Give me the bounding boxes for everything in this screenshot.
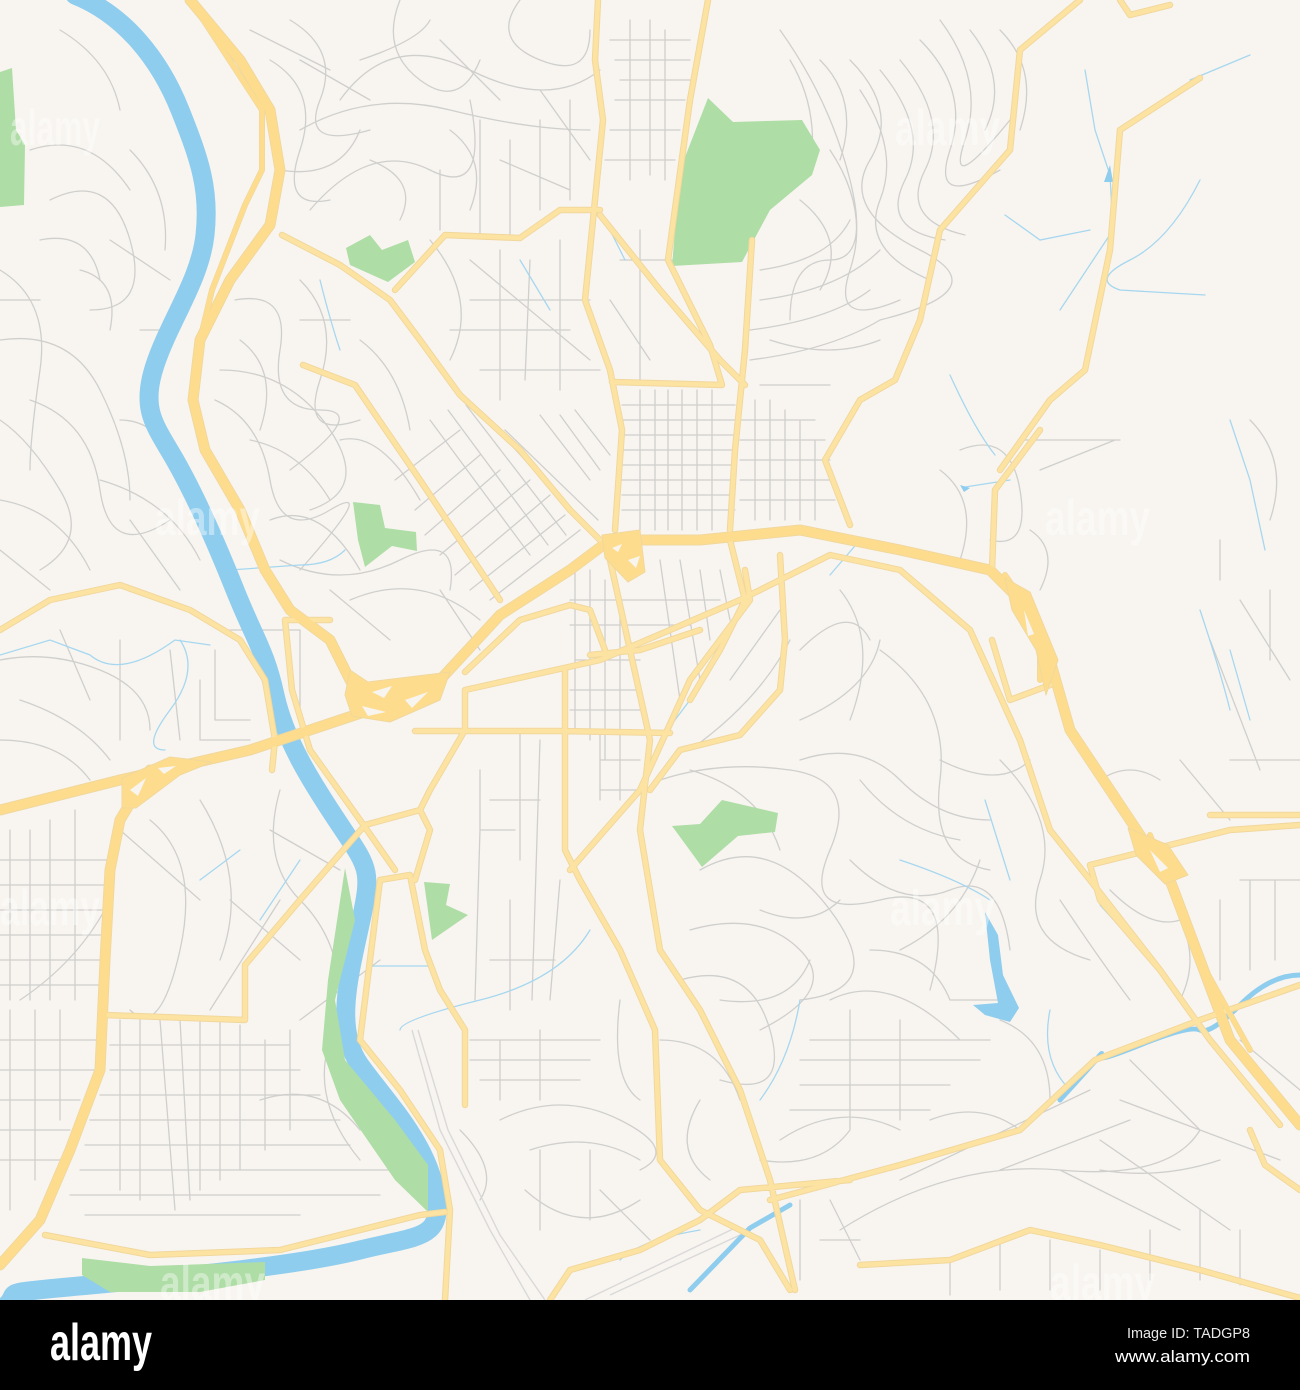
- park: central west: [353, 502, 417, 567]
- footer bar: [0, 1300, 1300, 1390]
- watermark: alamy: [10, 100, 100, 156]
- highway interchanges: [122, 530, 1188, 884]
- pond north: [722, 165, 1113, 492]
- watermark: alamy: [155, 490, 260, 546]
- park: central south: [672, 800, 778, 867]
- interchange: river west: [122, 757, 212, 808]
- park: bottom: [82, 1258, 265, 1292]
- interchange: centre: [602, 530, 645, 582]
- French Broad river: [0, 0, 437, 1310]
- watermark: alamy: [1045, 490, 1150, 546]
- park: north reserve: [672, 98, 820, 266]
- watermark: alamy: [1050, 1255, 1155, 1311]
- watermark: alamy: [160, 1255, 265, 1311]
- footer logo: alamy: [50, 1314, 152, 1372]
- lake: [973, 912, 1019, 1022]
- park: top left: [0, 68, 25, 207]
- interchange: east: [1005, 578, 1058, 695]
- parks: [0, 68, 820, 1292]
- watermark: alamy: [895, 100, 1000, 156]
- interchange gaps: [130, 544, 1168, 872]
- interchange: west: [345, 670, 450, 722]
- railway lines: [412, 1030, 740, 1300]
- watermark: [0, 100, 1155, 1311]
- park: south west: [424, 882, 468, 940]
- park: river strip: [322, 868, 428, 1212]
- image id: Image ID: TADGP8: [1127, 1325, 1250, 1342]
- park: northwest: [346, 235, 415, 282]
- Swannanoa river: [690, 975, 1300, 1290]
- watermark: alamy: [890, 880, 995, 936]
- interchange: south east: [1128, 828, 1188, 884]
- watermark: alamy: [0, 880, 100, 936]
- website: www.alamy.com: [1114, 1347, 1250, 1366]
